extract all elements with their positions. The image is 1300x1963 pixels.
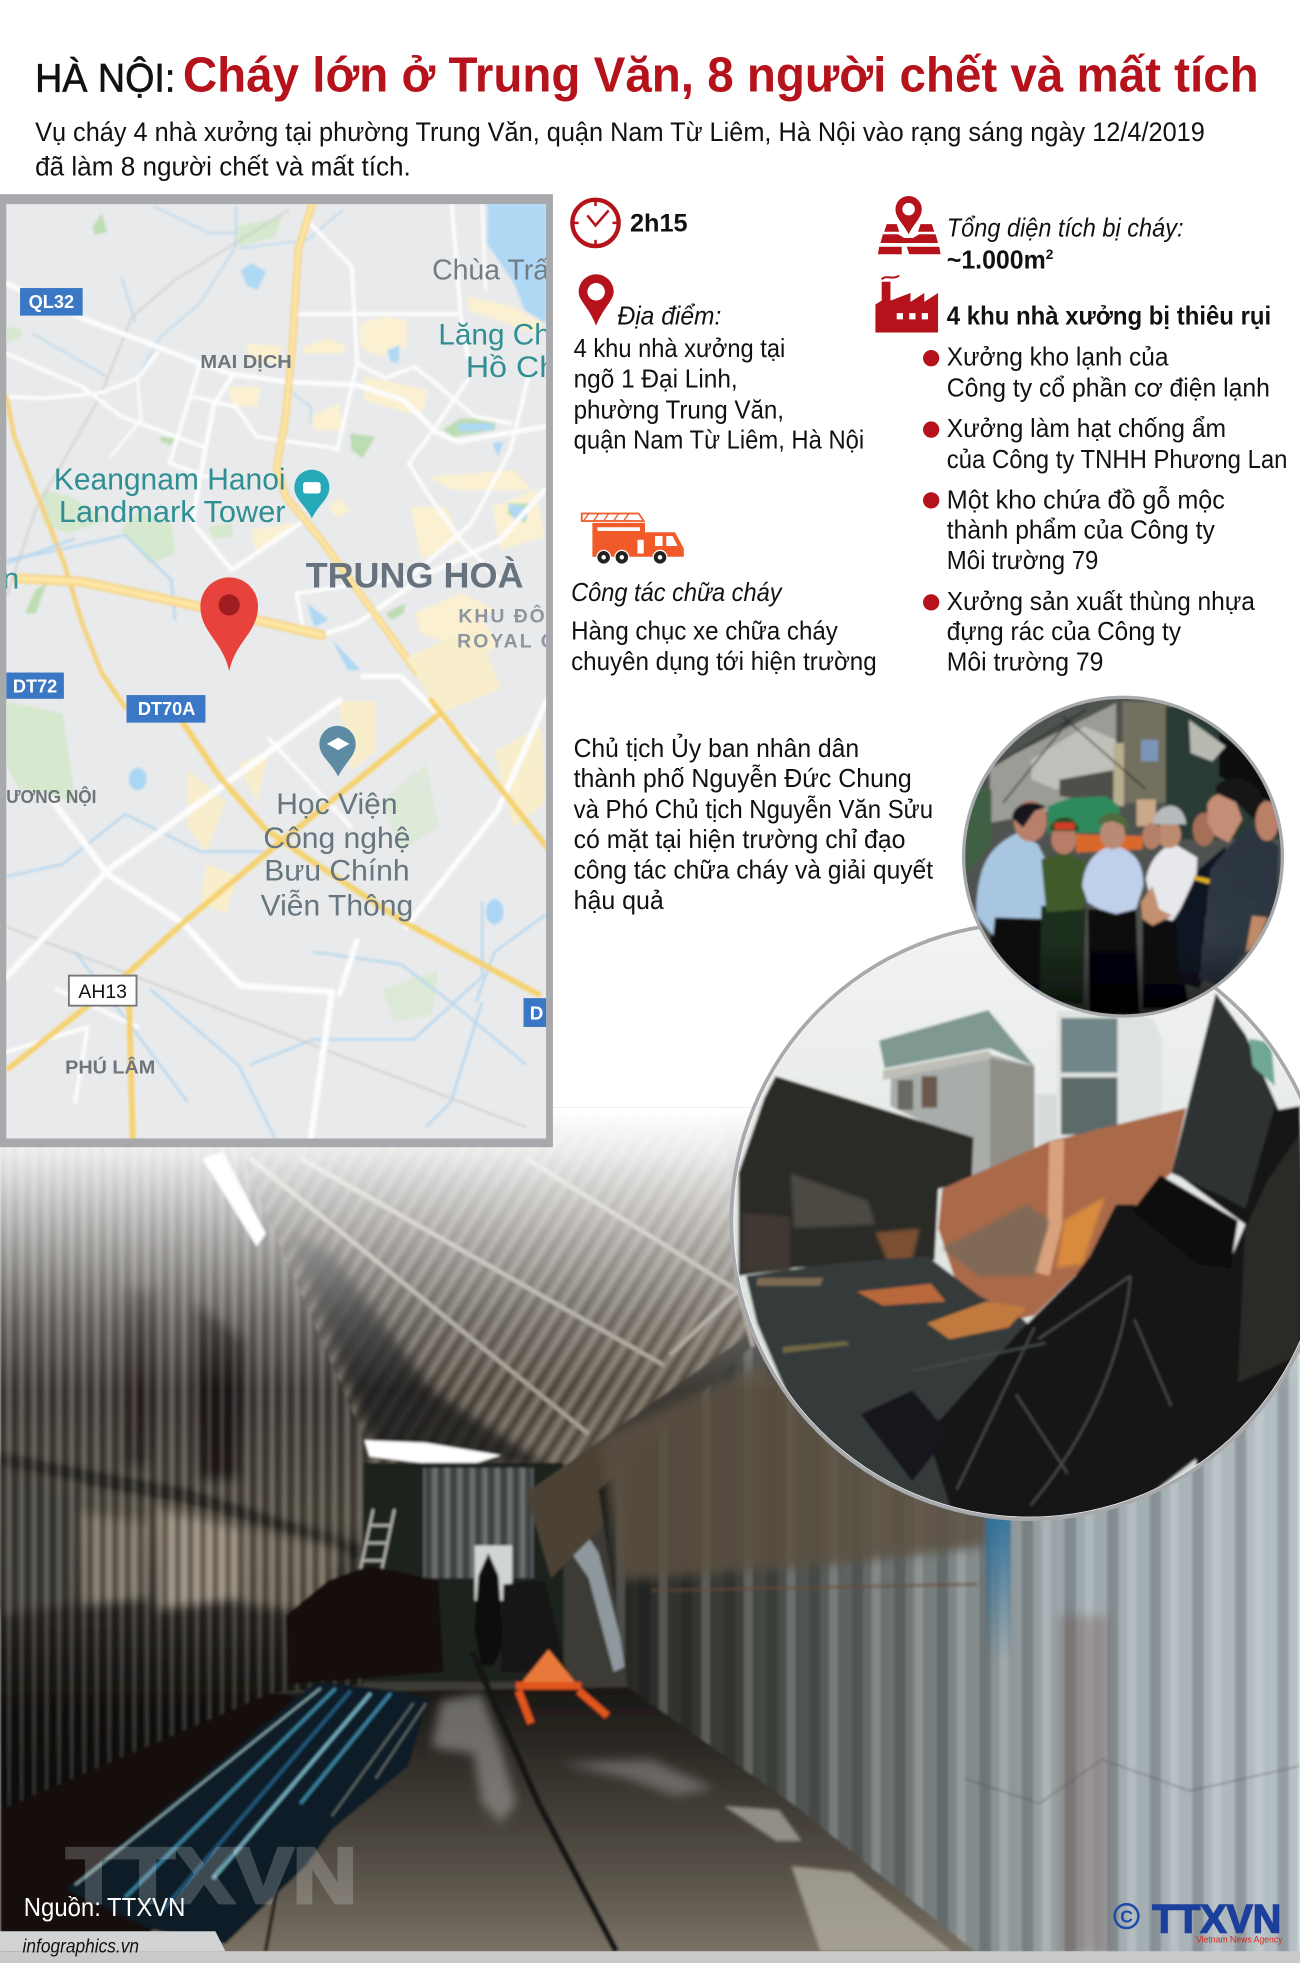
icon: location pin — [579, 274, 614, 326]
workshop list: Công ty cổ phần cơ điện lạnh — [947, 374, 1270, 402]
duration: 2h15 — [630, 210, 688, 238]
road badges: DT72 — [13, 677, 57, 697]
orange pallet jack — [516, 1649, 607, 1723]
firefighting block: Công tác chữa cháy — [571, 579, 783, 607]
location block: 4 khu nhà xưởng tại — [574, 335, 785, 363]
watermark: TTXVN — [66, 1833, 357, 1919]
icon: fire truck — [582, 513, 684, 564]
lower map — [188, 626, 546, 914]
upper map, zoomed coordinates — [6, 203, 546, 673]
map labels: PHÚ LÂM — [65, 1056, 155, 1077]
intro text — [35, 117, 1205, 181]
workshop list: Xưởng sản xuất thùng nhựa — [947, 588, 1256, 616]
icon: burnt area — [878, 196, 941, 254]
firefighting block — [571, 579, 877, 676]
intro text: đã làm 8 người chết và mất tích. — [35, 151, 411, 181]
title: Cháy lớn ở Trung Văn, 8 người chết và mất tích — [183, 48, 1259, 102]
firefighter — [1176, 813, 1226, 989]
website tab: infographics.vn — [23, 1935, 139, 1957]
bottom strip — [0, 1951, 1300, 1963]
circle photo: officials at the scene — [962, 696, 1284, 1018]
icon: clock — [572, 200, 619, 246]
left corrugated wall — [0, 1168, 374, 1810]
source: Nguồn: TTXVN — [24, 1894, 185, 1922]
red location pin — [200, 577, 258, 671]
teal tower pin — [294, 470, 329, 518]
burnt area text: Tổng diện tích bị cháy: — [947, 215, 1184, 243]
background photo: burnt workshop corridor — [0, 1077, 1300, 1963]
man in white-blue shirt — [977, 801, 1047, 995]
map labels: MAI DỊCH — [200, 351, 292, 372]
dark lower trousers shade — [1030, 945, 1251, 1014]
location block — [574, 302, 864, 454]
workshop list: Xưởng làm hạt chống ẩm — [947, 415, 1226, 443]
workshop list: Môi trường 79 — [947, 547, 1098, 575]
circle photo: burnt roof wreckage — [720, 920, 1300, 1540]
officials text: công tác chữa cháy và giải quyết — [574, 857, 933, 885]
street background — [967, 702, 1279, 876]
burnt shed — [739, 1076, 973, 1276]
firefighting block: chuyên dụng tới hiện trường — [571, 648, 877, 676]
photo fade to white — [0, 1107, 771, 1377]
panel: location map — [0, 194, 567, 1147]
map labels: Học Viện — [276, 788, 398, 821]
workshop list — [923, 344, 1287, 677]
location block: quận Nam Từ Liêm, Hà Nội — [574, 426, 864, 454]
man in patterned shirt — [1199, 778, 1279, 985]
officials text: có mặt tại hiện trường chỉ đạo — [574, 826, 905, 854]
website tab — [0, 1931, 225, 1957]
map labels: ROYAL C — [457, 630, 555, 652]
police officer — [1040, 817, 1086, 1005]
map labels: Lăng Chủ — [438, 318, 567, 351]
far buildings — [879, 1010, 1162, 1189]
officials text: và Phó Chủ tịch Nguyễn Văn Sửu — [574, 795, 933, 824]
map labels: KHU ĐÔ — [458, 603, 545, 627]
map labels: Bưu Chính — [264, 854, 410, 887]
map labels: ƯƠNG NỘI — [6, 786, 96, 807]
burnt area text: 2 — [1046, 247, 1054, 262]
map labels: Landmark Tower — [59, 494, 286, 529]
man in green helmet — [1082, 813, 1143, 1014]
TTXVN logo: Vietnam News Agency — [1196, 1934, 1283, 1944]
intro text: Vụ cháy 4 nhà xưởng tại phường Trung Văn, quận Nam Từ Liêm, Hà Nội vào rạng sáng ngày 12/4/2019 — [35, 117, 1205, 147]
workshop list: Môi trường 79 — [947, 649, 1103, 677]
road badges — [6, 288, 546, 1027]
officials text — [574, 733, 933, 915]
map labels: Hồ Chí — [466, 351, 567, 384]
icon: factory — [875, 276, 938, 333]
officials text: Chủ tịch Ủy ban nhân dân — [574, 733, 859, 763]
road badges: AH13 — [78, 981, 127, 1003]
location block: ngõ 1 Đại Linh, — [574, 366, 738, 394]
ceiling sheets — [203, 1077, 758, 1475]
black debris — [932, 1203, 1230, 1517]
burnt area text: ~1.000m — [947, 247, 1046, 275]
workshops heading: 4 khu nhà xưởng bị thiêu rụi — [947, 302, 1271, 330]
collapsed grey sheets — [744, 1256, 1029, 1506]
right corrugated wall — [599, 1346, 1300, 1963]
road badges: D — [530, 1002, 543, 1023]
road badges: QL32 — [29, 292, 74, 312]
map labels: Công nghệ — [263, 822, 410, 855]
map labels — [3, 254, 567, 1077]
map labels: Keangnam Hanoi — [54, 462, 286, 497]
map labels: n — [3, 563, 19, 596]
title: HÀ NỘI: — [35, 55, 175, 100]
man in white helmet — [1141, 806, 1197, 1009]
TTXVN logo: C — [1120, 1906, 1133, 1926]
map labels: TRUNG HOÀ — [306, 555, 524, 595]
orange corrugated roof — [936, 1107, 1188, 1320]
location block: phường Trung Văn, — [574, 396, 784, 424]
officials text: hậu quả — [574, 887, 664, 915]
concrete floor — [0, 1652, 989, 1963]
workshop list: đựng rác của Công ty — [947, 618, 1181, 646]
TTXVN logo: TTXVN — [1152, 1897, 1281, 1941]
officials text: thành phố Nguyễn Đức Chung — [574, 764, 912, 793]
school pin — [319, 726, 356, 776]
stack of blue metal sheets — [66, 1682, 428, 1944]
far end of corridor — [286, 1440, 627, 1684]
workshop list: Xưởng kho lạnh của — [947, 344, 1169, 372]
workshop list: Một kho chứa đồ gỗ mộc — [947, 485, 1225, 514]
map labels: Chùa Trấn — [432, 254, 565, 286]
map labels: Viễn Thông — [261, 889, 413, 922]
location block: Địa điểm: — [617, 302, 721, 330]
firefighting block: Hàng chục xe chữa cháy — [571, 617, 838, 645]
burnt area text — [947, 215, 1184, 275]
workshop list: thành phẩm của Công ty — [947, 517, 1215, 545]
road badges: DT70A — [138, 699, 195, 719]
